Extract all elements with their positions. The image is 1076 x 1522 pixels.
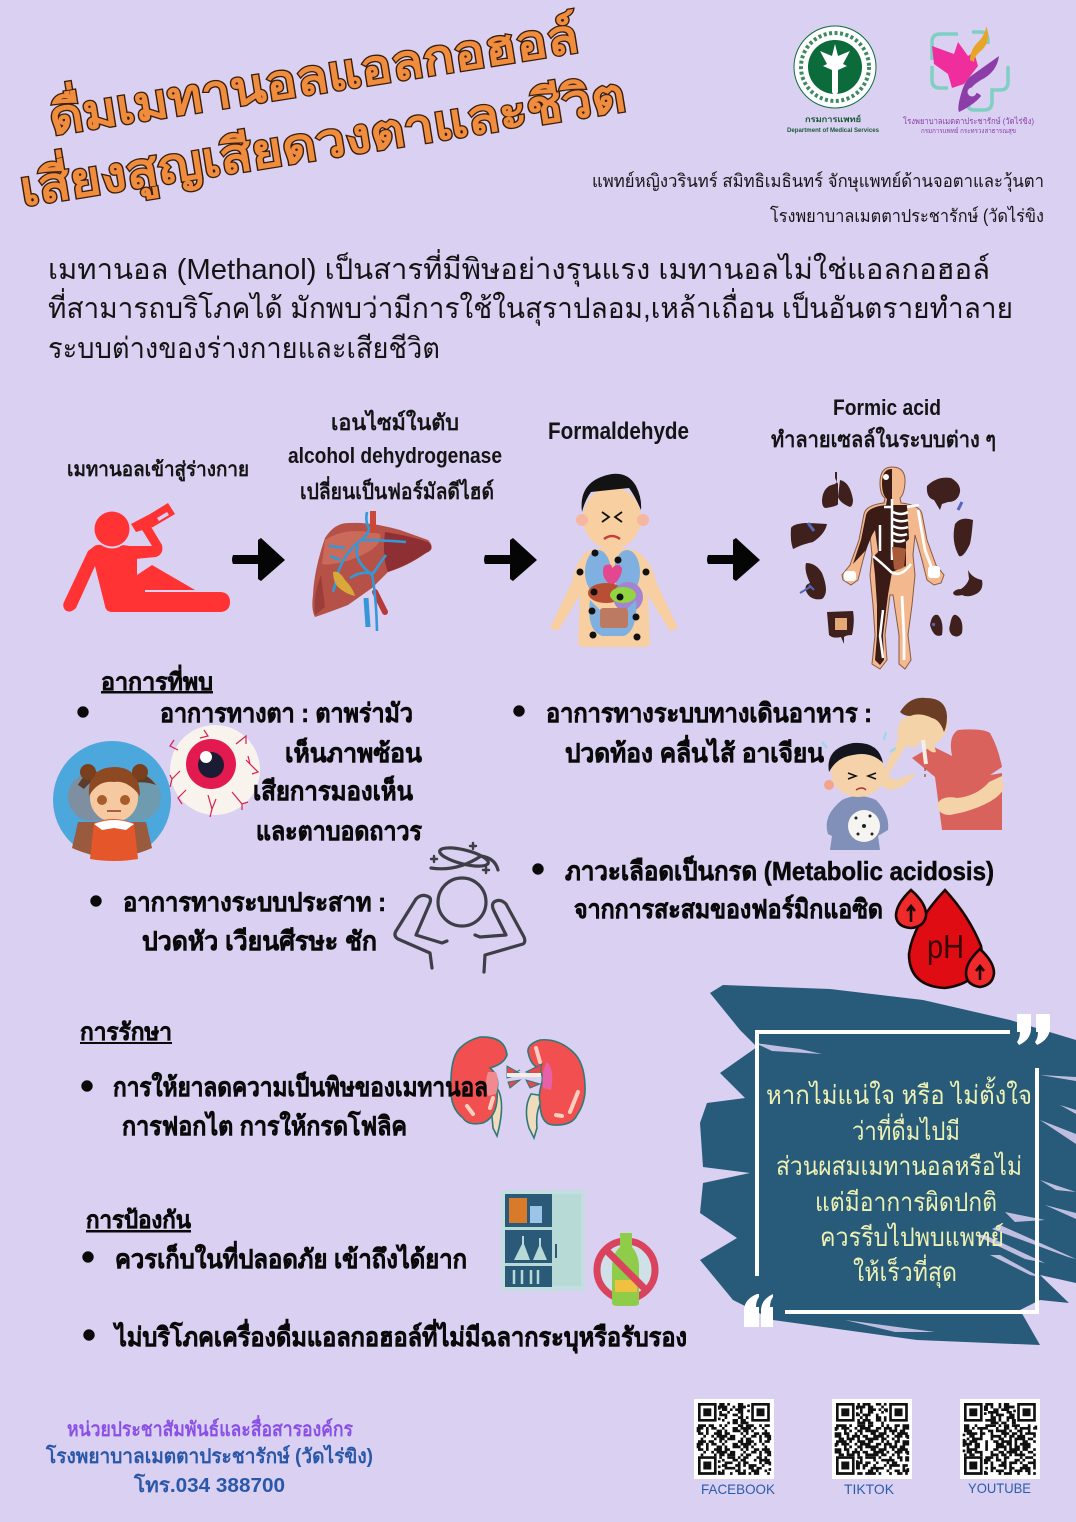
qr labels: FACEBOOK <box>701 1481 776 1497</box>
symptom: digestive: ปวดท้อง คลื่นไส้ อาเจียน <box>565 734 824 768</box>
author credit: แพทย์หญิงวรินทร์ สมิทธิเมธินทร์ จักษุแพทย์ด้านจอตาและวุ้นตา <box>592 171 1044 192</box>
qr: youtube <box>960 1399 1040 1479</box>
logo: metta hospital: โรงพยาบาลเมตตาประชารักษ์ (วัดไร่ขิง) <box>903 116 1034 126</box>
qr labels: YOUTUBE <box>968 1480 1031 1496</box>
author credit <box>592 171 1044 226</box>
callout text: ส่วนผสมเมทานอลหรือไม่ <box>776 1151 1022 1181</box>
symptom: eyes: อาการทางตา : ตาพร่ามัว <box>160 698 413 728</box>
footer contact: โทร.034 388700 <box>133 1473 285 1497</box>
logo: ministry of public health: กรมการแพทย์ <box>805 114 861 124</box>
callout text: แต่มีอาการผิดปกติ <box>815 1187 997 1217</box>
symptom: eyes: เห็นภาพซ้อน <box>285 737 422 768</box>
heading: symptoms: อาการที่พบ <box>101 664 213 696</box>
qr labels: TIKTOK <box>844 1481 895 1497</box>
flow labels: เปลี่ยนเป็นฟอร์มัลดีไฮด์ <box>300 475 494 504</box>
arrow 1 <box>232 538 285 581</box>
logo: ministry of public health <box>787 26 880 134</box>
icon: girl with double vision <box>53 741 171 861</box>
treatment text: การให้ยาลดความเป็นพิษของเมทานอล <box>113 1071 488 1102</box>
logo: metta hospital <box>903 26 1034 135</box>
title: ดื่มเมทานอลแอลกอฮอล์ <box>44 1 582 146</box>
intro paragraph: ที่สามารถบริโภคได้ มักพบว่ามีการใช้ในสุราปลอม,เหล้าเถื่อน เป็นอันตรายทำลาย <box>48 288 1013 326</box>
qr: tiktok <box>832 1399 912 1479</box>
flow labels: เมทานอลเข้าสู่ร่างกาย <box>67 458 249 483</box>
footer contact: โรงพยาบาลเมตตาประชารักษ์ (วัดไร่ขิง) <box>45 1444 373 1468</box>
icon: kidneys <box>451 1037 585 1138</box>
flow labels: alcohol dehydrogenase <box>288 443 502 468</box>
callout: closing quote mark <box>1017 1014 1050 1045</box>
flow labels: เอนไซม์ในตับ <box>331 409 459 435</box>
callout text: ว่าที่ดื่มไปมี <box>852 1113 960 1146</box>
icon: child with stomach ache <box>822 732 896 850</box>
callout text <box>766 1076 1032 1288</box>
title <box>15 1 630 220</box>
prevention text: ไม่บริโภคเครื่องดื่มแอลกอฮอล์ที่ไม่มีฉลากระบุหรือรับรอง <box>112 1318 687 1354</box>
callout text: หากไม่แน่ใจ หรือ ไม่ตั้งใจ <box>766 1076 1032 1110</box>
symptom: eyes: และตาบอดถาวร <box>256 816 422 846</box>
footer contact: หน่วยประชาสัมพันธ์และสื่อสารองค์กร <box>67 1414 353 1441</box>
icon: vomiting man <box>882 698 1004 830</box>
flow labels: Formaldehyde <box>548 418 689 445</box>
arrow 3 <box>707 538 760 581</box>
symptom: eyes <box>78 698 422 846</box>
prevention text: ควรเก็บในที่ปลอดภัย เข้าถึงได้ยาก <box>115 1240 467 1274</box>
symptom: metabolic acidosis: ภาวะเลือดเป็นกรด (Metabolic acidosis) <box>565 855 994 886</box>
symptom: digestive <box>514 698 872 768</box>
callout text: ควรรีบไปพบแพทย์ <box>820 1222 1004 1252</box>
treatment text <box>82 1071 488 1141</box>
intro paragraph: เมทานอล (Methanol) เป็นสารที่มีพิษอย่างรุนแรง เมทานอลไม่ใช่แอลกอฮอล์ <box>48 249 990 287</box>
icon: person drinking <box>63 503 230 612</box>
symptom: eyes: เสียการมองเห็น <box>253 775 413 806</box>
qr: facebook <box>694 1399 774 1479</box>
footer contact <box>45 1414 373 1497</box>
qr labels <box>701 1480 1031 1497</box>
symptom: nervous system <box>90 887 386 956</box>
flow labels <box>67 395 996 504</box>
title: เสี่ยงสูญเสียดวงตาและชีวิต <box>15 60 630 220</box>
heading: treatment: การรักษา <box>80 1019 172 1046</box>
callout: white frame <box>757 1032 1037 1312</box>
icon: child with damaged organs <box>550 474 678 647</box>
intro paragraph <box>48 249 1013 365</box>
callout: brush background <box>700 985 1076 1345</box>
icon: liver <box>312 511 432 631</box>
icon: dizzy person <box>395 843 525 972</box>
callout: opening quote mark <box>744 1294 773 1327</box>
flow labels: Formic acid <box>833 395 941 420</box>
icon: blood ph drop: pH <box>927 928 964 965</box>
symptom: digestive: อาการทางระบบทางเดินอาหาร : <box>546 698 872 728</box>
icon: storage cabinet <box>501 1190 585 1291</box>
flow labels: ทำลายเซลล์ในระบบต่าง ๆ <box>771 426 996 452</box>
icon: bloodshot eyeball <box>170 725 262 817</box>
logo: ministry of public health: Department of Medical Services <box>787 128 880 134</box>
heading: prevention: การป้องกัน <box>86 1207 192 1234</box>
icon: blood ph drop <box>896 890 994 988</box>
logo: metta hospital: กรมการแพทย์ กระทรวงสาธารณสุข <box>921 127 1016 135</box>
icon: no alcohol bottle <box>597 1233 655 1306</box>
symptom: nervous system: ปวดหัว เวียนศีรษะ ชัก <box>142 926 377 956</box>
prevention text <box>82 1240 687 1354</box>
arrow 2 <box>484 538 537 581</box>
author credit: โรงพยาบาลเมตตาประชารักษ์ (วัดไร่ขิง <box>770 205 1044 226</box>
symptom: metabolic acidosis: จากการสะสมของฟอร์มิกแอซิด <box>574 894 883 924</box>
icon: anatomy body with organs <box>791 467 982 669</box>
symptom: nervous system: อาการทางระบบประสาท : <box>123 887 386 917</box>
symptom: metabolic acidosis <box>532 855 994 924</box>
treatment text: การฟอกไต การให้กรดโฟลิค <box>122 1110 407 1141</box>
callout text: ให้เร็วที่สุด <box>853 1254 957 1288</box>
intro paragraph: ระบบต่างของร่างกายและเสียชีวิต <box>48 333 440 365</box>
